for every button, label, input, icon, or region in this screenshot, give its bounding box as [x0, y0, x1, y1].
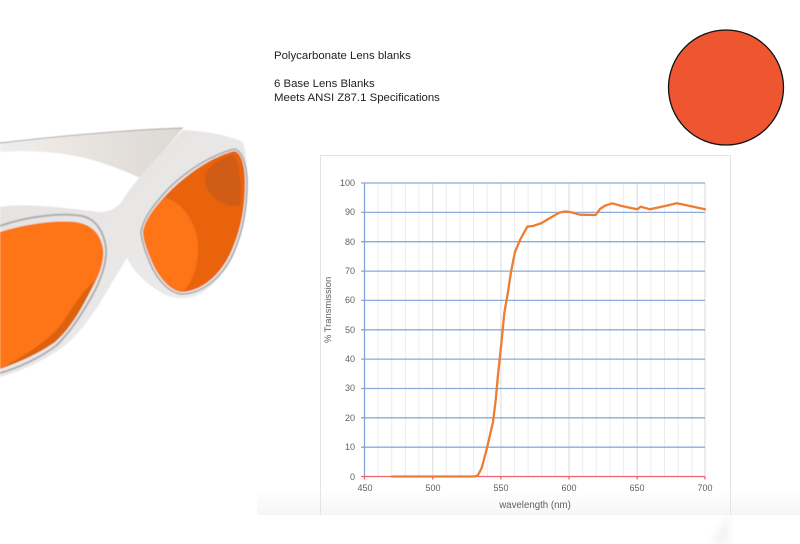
glasses temple arm [0, 128, 183, 178]
text block: lens specifications: Meets ANSI Z87.1 Specifications [274, 92, 440, 104]
y axis tick labels: 30 [345, 383, 355, 393]
y axis tick labels: 90 [345, 207, 355, 217]
glasses frame [0, 130, 247, 377]
temple top edge [0, 128, 183, 143]
y axis tick labels: 60 [345, 295, 355, 305]
x axis tick labels: 600 [561, 483, 577, 493]
y axis tick labels: 40 [345, 354, 355, 364]
right lens [143, 151, 245, 292]
x axis [361, 476, 705, 480]
chart minor vertical gridlines [378, 183, 692, 476]
right lens light patch [143, 198, 198, 292]
y axis [364, 183, 366, 476]
text block: lens specifications: Polycarbonate Lens blanks [274, 50, 411, 62]
y axis tick labels [340, 178, 355, 482]
right lens dark band [205, 155, 241, 206]
background fade behind chart bottom [257, 488, 800, 515]
x axis tick labels: 550 [493, 483, 509, 493]
x axis tick labels: 650 [629, 483, 645, 493]
text block: lens specifications [274, 50, 440, 104]
transmission curve [392, 203, 705, 477]
y axis tick labels: 50 [345, 325, 355, 335]
text block: lens specifications: 6 Base Lens Blanks [274, 78, 375, 90]
faint streak artefact [712, 515, 730, 544]
lens colour swatch circle [668, 30, 784, 145]
chart frame [320, 156, 730, 515]
chart horizontal gridlines [361, 183, 705, 447]
x axis tick labels: 500 [425, 483, 441, 493]
left lens [0, 221, 103, 369]
y axis tick labels: 20 [345, 413, 355, 423]
x axis tick labels: 450 [357, 483, 373, 493]
panel: transmission chart [320, 156, 730, 515]
y axis tick labels: 70 [345, 266, 355, 276]
x axis title: wavelength (nm) [498, 500, 571, 511]
icon: orange safety glasses [0, 128, 247, 377]
y axis tick labels: 10 [345, 442, 355, 452]
chart major vertical gridlines [433, 183, 705, 476]
right lens rim [141, 149, 247, 294]
y axis tick labels: 100 [340, 178, 355, 188]
x axis tick labels [357, 483, 713, 493]
y axis tick labels: 80 [345, 237, 355, 247]
glasses frame inner rim [0, 215, 106, 373]
y axis title: % Transmission [322, 277, 333, 343]
y axis tick labels: 0 [350, 472, 355, 482]
left lens shadow [0, 280, 95, 369]
x axis tick labels: 700 [697, 483, 713, 493]
